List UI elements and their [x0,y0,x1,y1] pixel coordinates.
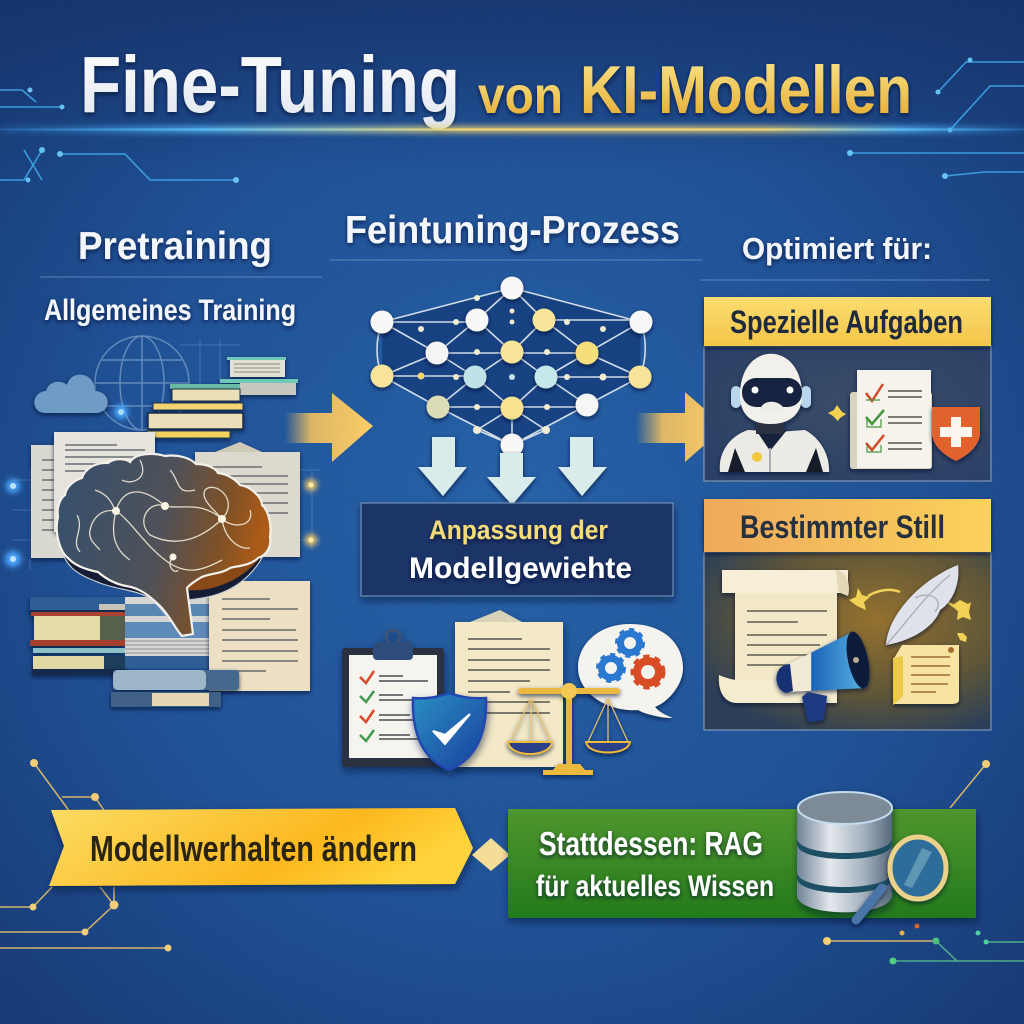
icon: arc to feather [868,590,960,612]
icon: magnifying glass [856,837,946,920]
icon: document top left [54,432,155,532]
icon: document bottom right [209,581,310,691]
text: Bestimmter Still: Bestimmter Still [740,509,945,545]
icon: sparkle [828,405,846,421]
arrow: pretraining to process [285,393,373,462]
panel: pretraining illustration [5,336,320,707]
bottom-right circuit decoration [823,760,1024,964]
icon: feather [886,565,958,645]
title: von [478,67,563,125]
arrows: down arrows [418,437,607,505]
gear: blue top [617,630,643,656]
icon: grid lines [13,340,320,570]
gear: orange [633,657,663,687]
text: Spezielle Aufgaben: Spezielle Aufgaben [730,304,963,340]
banner: Modellverhalten ändern [49,808,473,886]
header: Spezielle Aufgaben [704,297,991,346]
title: KI-Modellen [580,52,912,128]
icon: database [797,792,892,912]
icon: checklist [850,370,932,469]
icon: glow nodes [5,405,317,567]
heading: Feintuning-Prozess: Feintuning-Prozess [345,209,680,252]
icon: stars [849,588,971,642]
heading: Optimiert für: Optimiert für: [742,231,932,266]
glowing title line [0,126,1024,133]
panel: neural network [370,276,652,456]
panel: RAG [508,792,976,920]
text: Modellwerhalten ändern: Modellwerhalten ändern [90,828,417,869]
panel: Bestimmter Stil [704,499,991,730]
text: Anpassung der: Anpassung der [429,515,608,545]
text: Modellgewiehte: Modellgewiehte [409,552,632,585]
icon: robot [720,354,829,472]
icon: clipboard [342,630,444,767]
icon: document [455,610,563,767]
subheading: Allgemeines Training: Allgemeines Training [44,294,296,327]
bottom-left circuit decoration [0,759,172,952]
icon: brain [57,454,271,636]
icon: scroll [719,570,849,703]
gear: blue left [598,655,624,681]
panel: process icons [342,610,683,775]
top-left circuit decoration [0,88,239,183]
icon: cloud [34,375,108,413]
icon: speech bubble with gears [578,624,683,718]
panel: Anpassung der Modellgewichte [361,503,673,596]
network connections [377,288,645,445]
icon: document back left [31,445,71,558]
icon: sticky note [893,645,959,705]
icon: globe [95,336,189,430]
icon: orange shield [932,407,980,461]
network small nodes [418,295,606,434]
top-right circuit decoration [847,58,1024,179]
icon: book stack centre [125,597,209,668]
panel: Spezielle Aufgaben [704,297,991,481]
icon: book stack bottom left [30,597,125,675]
icon: diamond connector [472,838,510,871]
icon: shield [413,693,486,770]
title [80,40,912,129]
text: Stattdessen RAG: Stattdessen: RAG [539,825,763,862]
icon: megaphone [776,630,874,722]
network large nodes [370,276,652,456]
text: für aktuelles Wissen: für aktuelles Wissen [536,870,774,903]
arrow: process to result [636,392,725,462]
header: Bestimmter Still [704,499,991,552]
heading: Pretraining: Pretraining [78,225,272,268]
brain folds [76,460,251,571]
title: Fine-Tuning [80,40,460,129]
icon: book stack top [147,357,298,438]
icon: document right [195,442,300,557]
icon: scales [508,683,630,775]
icon: bottom flat books [111,670,239,707]
